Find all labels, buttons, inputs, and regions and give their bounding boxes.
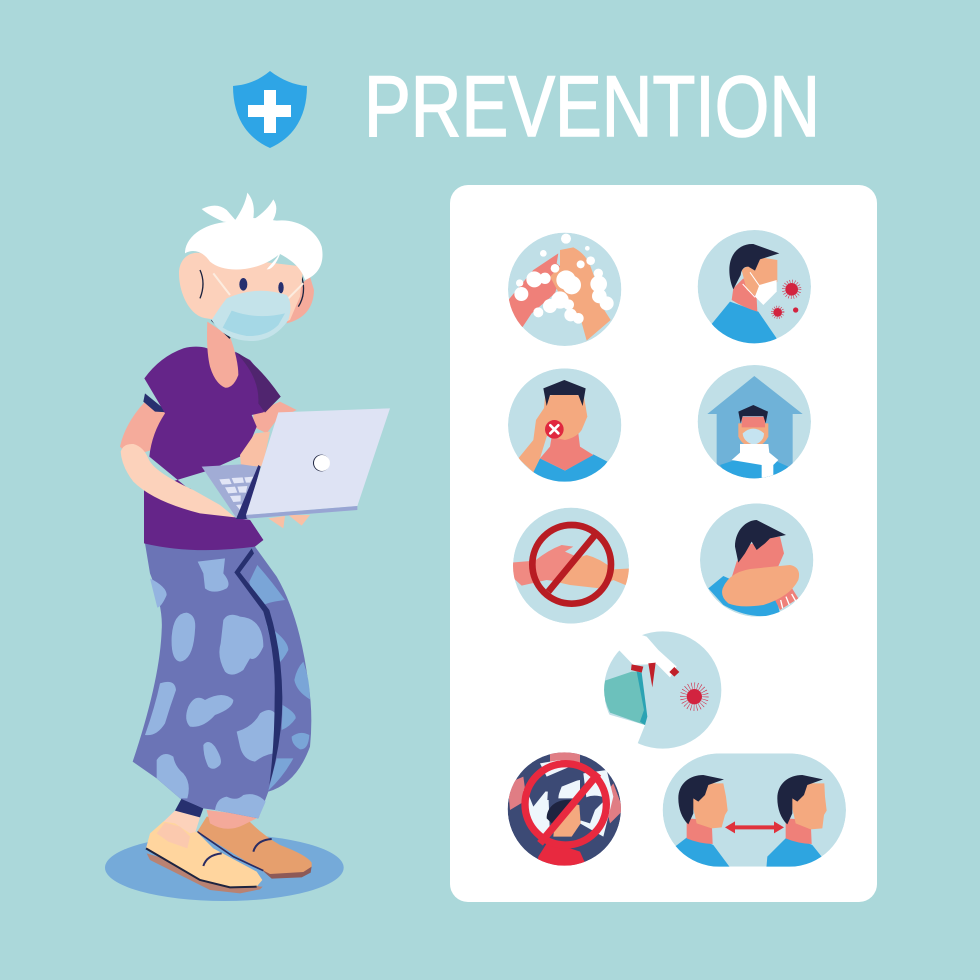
face mask xyxy=(212,291,290,341)
icon: avoid crowds xyxy=(508,752,623,867)
front forearm xyxy=(121,444,235,517)
hand on keyboard xyxy=(240,432,270,475)
icon: man in mask with virus xyxy=(698,230,811,353)
icon: no handshake xyxy=(510,508,633,624)
title: PREVENTION xyxy=(364,59,820,155)
laptop xyxy=(202,408,390,519)
icon: social distancing xyxy=(663,753,846,868)
panel: prevention measures xyxy=(450,185,877,902)
shirt xyxy=(144,347,281,548)
neck xyxy=(207,322,238,388)
head xyxy=(179,193,323,341)
floor shadow xyxy=(105,834,344,901)
illustration: person with laptop xyxy=(105,193,390,901)
legs and shoes xyxy=(133,543,312,893)
icon: cough into elbow xyxy=(700,503,813,617)
icon: stay home xyxy=(698,365,811,480)
icon: hand washing xyxy=(503,233,621,346)
back arm xyxy=(120,402,167,457)
patterned trousers xyxy=(133,543,311,818)
icon: shield with cross xyxy=(233,71,307,148)
icon: do not touch face xyxy=(508,368,621,487)
icon: disinfectant spray xyxy=(590,631,721,753)
